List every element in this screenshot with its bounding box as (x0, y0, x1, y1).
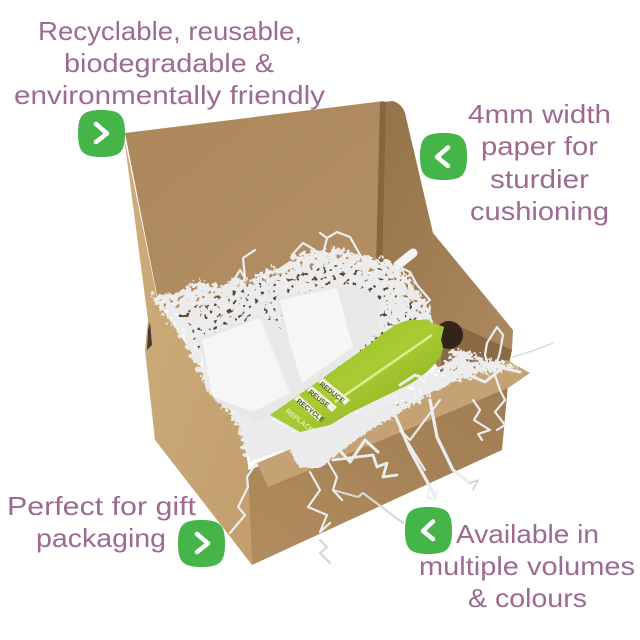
box inner shadow (440, 320, 512, 375)
text: 4mm width callout: sturdier (490, 164, 589, 194)
paper shreds over the box (160, 232, 553, 563)
dark bottle cap (435, 321, 463, 349)
heading: recyclable callout: biodegradable & (64, 48, 274, 78)
white cup right (280, 288, 353, 383)
heading: recyclable callout: Recyclable, reusable, (38, 16, 302, 46)
solid paper around cups (198, 284, 380, 425)
label replace: REPLACE (284, 408, 315, 434)
icon: green arrow button left, volumes (405, 507, 452, 554)
text: gift packaging callout (7, 491, 197, 553)
text: volumes and colours callout: Available in (456, 519, 599, 549)
box corner fold (376, 102, 386, 270)
box front folded flap (257, 360, 530, 487)
box right inner panel (380, 101, 513, 385)
box back panel (125, 101, 384, 310)
cardboard box (124, 101, 530, 565)
icon: green arrow button right, recyclable (78, 110, 125, 157)
label reuse: REUSE (307, 389, 330, 410)
label reduce: REDUCE (318, 381, 346, 405)
text: volumes and colours callout: multiple volumes (419, 551, 635, 581)
heading: recyclable callout (14, 16, 325, 110)
bottle highlight (335, 335, 432, 402)
white bottle straw (398, 253, 413, 265)
box left flap (124, 137, 252, 565)
text: 4mm width callout: paper for (481, 131, 598, 161)
bottle label bands (294, 378, 350, 421)
heading: recyclable callout: environmentally friendly (14, 80, 325, 110)
box front outer face (248, 385, 508, 565)
text: volumes and colours callout: & colours (468, 583, 587, 613)
hand hole (147, 322, 152, 350)
white cup left (202, 318, 290, 412)
text: gift packaging callout: packaging (36, 523, 166, 553)
shadow beneath shredded paper (175, 264, 425, 410)
icon: green arrow button right, gift packaging (178, 520, 225, 567)
shredded paper mass (150, 248, 520, 466)
front band of paper over the bottle end (246, 398, 395, 468)
text: gift packaging callout: Perfect for gift (7, 491, 197, 521)
text: 4mm width callout (468, 99, 611, 226)
text: volumes and colours callout (419, 519, 635, 613)
icon: green arrow button left, 4mm width (420, 133, 467, 180)
text: 4mm width callout: 4mm width (468, 99, 611, 129)
text: 4mm width callout: cushioning (470, 196, 609, 226)
green bottle (270, 319, 444, 434)
label recycle: RECYCLE (295, 398, 326, 424)
